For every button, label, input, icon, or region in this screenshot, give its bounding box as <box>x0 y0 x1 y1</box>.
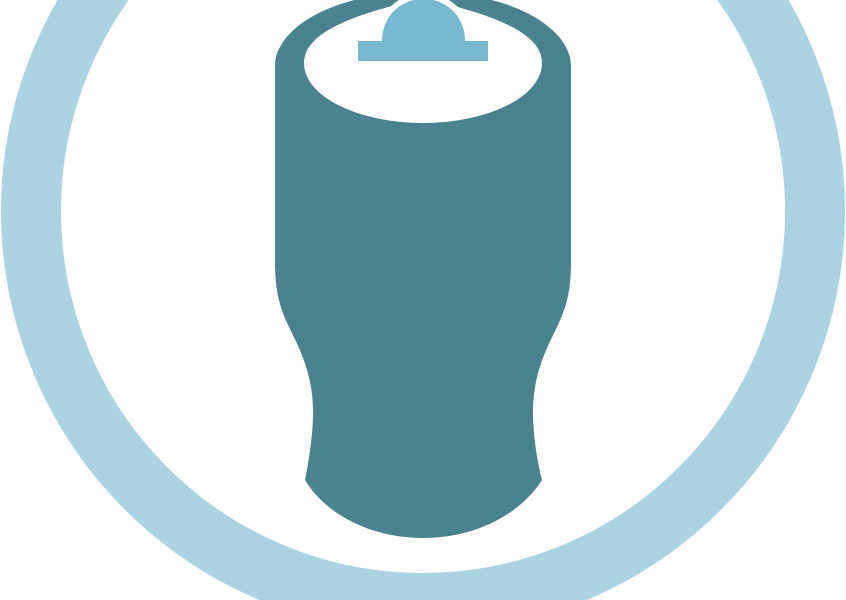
glass body <box>275 0 571 538</box>
dome <box>382 0 465 41</box>
glass opening <box>304 6 542 123</box>
icon: dome with base <box>358 0 488 89</box>
dome base <box>358 41 488 61</box>
dome halo <box>376 0 472 89</box>
